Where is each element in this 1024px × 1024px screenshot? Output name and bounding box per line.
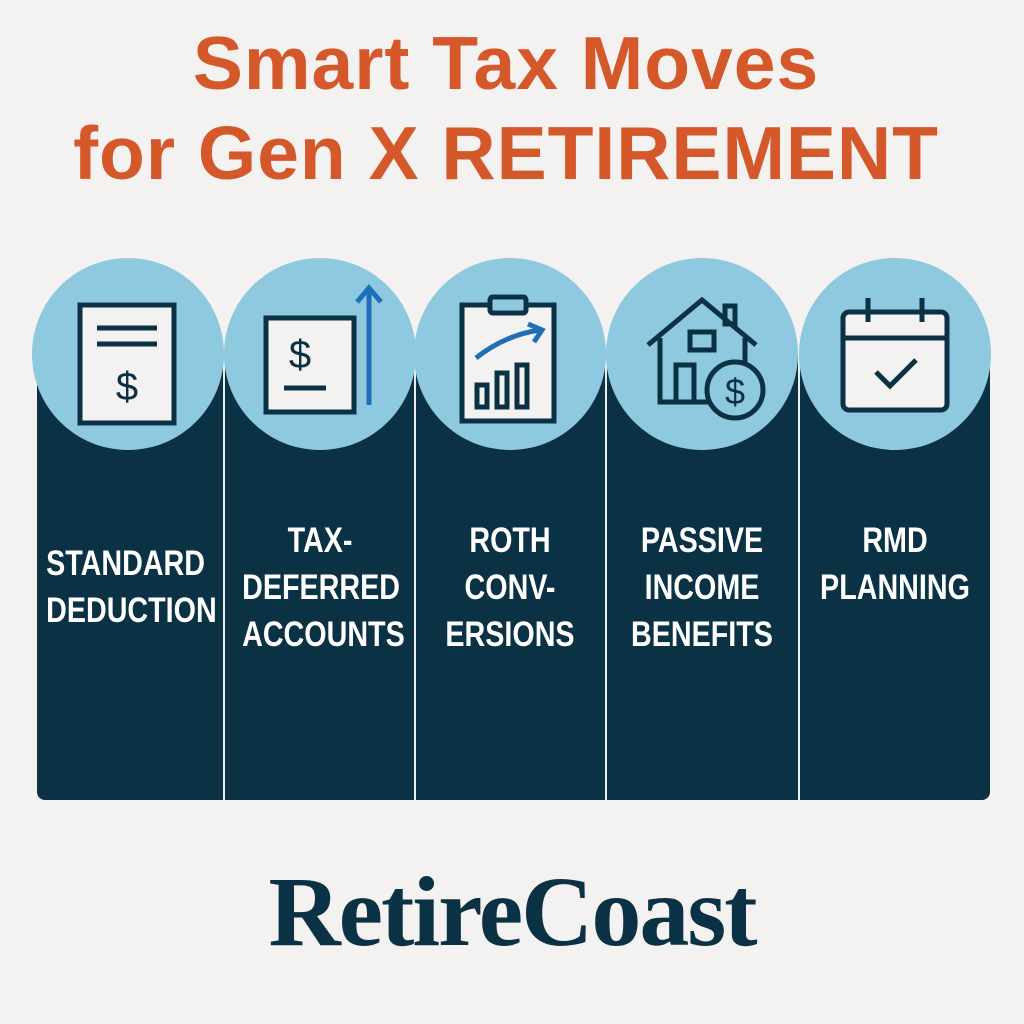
logo: RetireCoast [268, 856, 756, 967]
label: roth conversions: ROTH [469, 521, 551, 560]
icon: calendar check [843, 298, 947, 410]
label: passive income benefits [631, 521, 773, 654]
circle 5 [799, 258, 991, 450]
title: for Gen X RETIREMENT [73, 111, 939, 195]
icon: dollar doc with up arrow [266, 288, 381, 412]
label: tax-deferred accounts: ACCOUNTS [242, 615, 405, 654]
label: roth conversions: ERSIONS [445, 615, 575, 654]
icon: clipboard chart [462, 297, 554, 421]
icon: house with coin [648, 300, 763, 418]
label: standard deduction: STANDARD [46, 544, 205, 583]
label: standard deduction [46, 544, 217, 630]
title: Smart Tax Moves [193, 21, 819, 105]
circle 1 [32, 258, 224, 450]
circle 3 [414, 258, 606, 450]
panel: dark background [37, 355, 990, 800]
label: passive income benefits: INCOME [645, 568, 759, 607]
circle 2 [224, 258, 416, 450]
icon: document with dollar [80, 305, 174, 423]
icon: dollar doc with up arrow: $ [289, 333, 311, 377]
icon: house with coin: $ [725, 371, 745, 412]
label: tax-deferred accounts: DEFERRED [242, 568, 400, 607]
circle 4 [606, 258, 798, 450]
label: passive income benefits: BENEFITS [631, 615, 773, 654]
icon: document with dollar: $ [116, 365, 138, 409]
label: standard deduction: DEDUCTION [46, 591, 217, 630]
label: rmd planning: PLANNING [820, 568, 970, 607]
label: tax-deferred accounts [242, 521, 405, 654]
label: passive income benefits: PASSIVE [641, 521, 763, 560]
label: rmd planning: RMD [862, 521, 928, 560]
label: rmd planning [820, 521, 970, 607]
title [73, 21, 939, 195]
label: roth conversions [445, 521, 575, 654]
label: tax-deferred accounts: TAX- [288, 521, 352, 560]
label: roth conversions: CONV- [465, 568, 555, 607]
